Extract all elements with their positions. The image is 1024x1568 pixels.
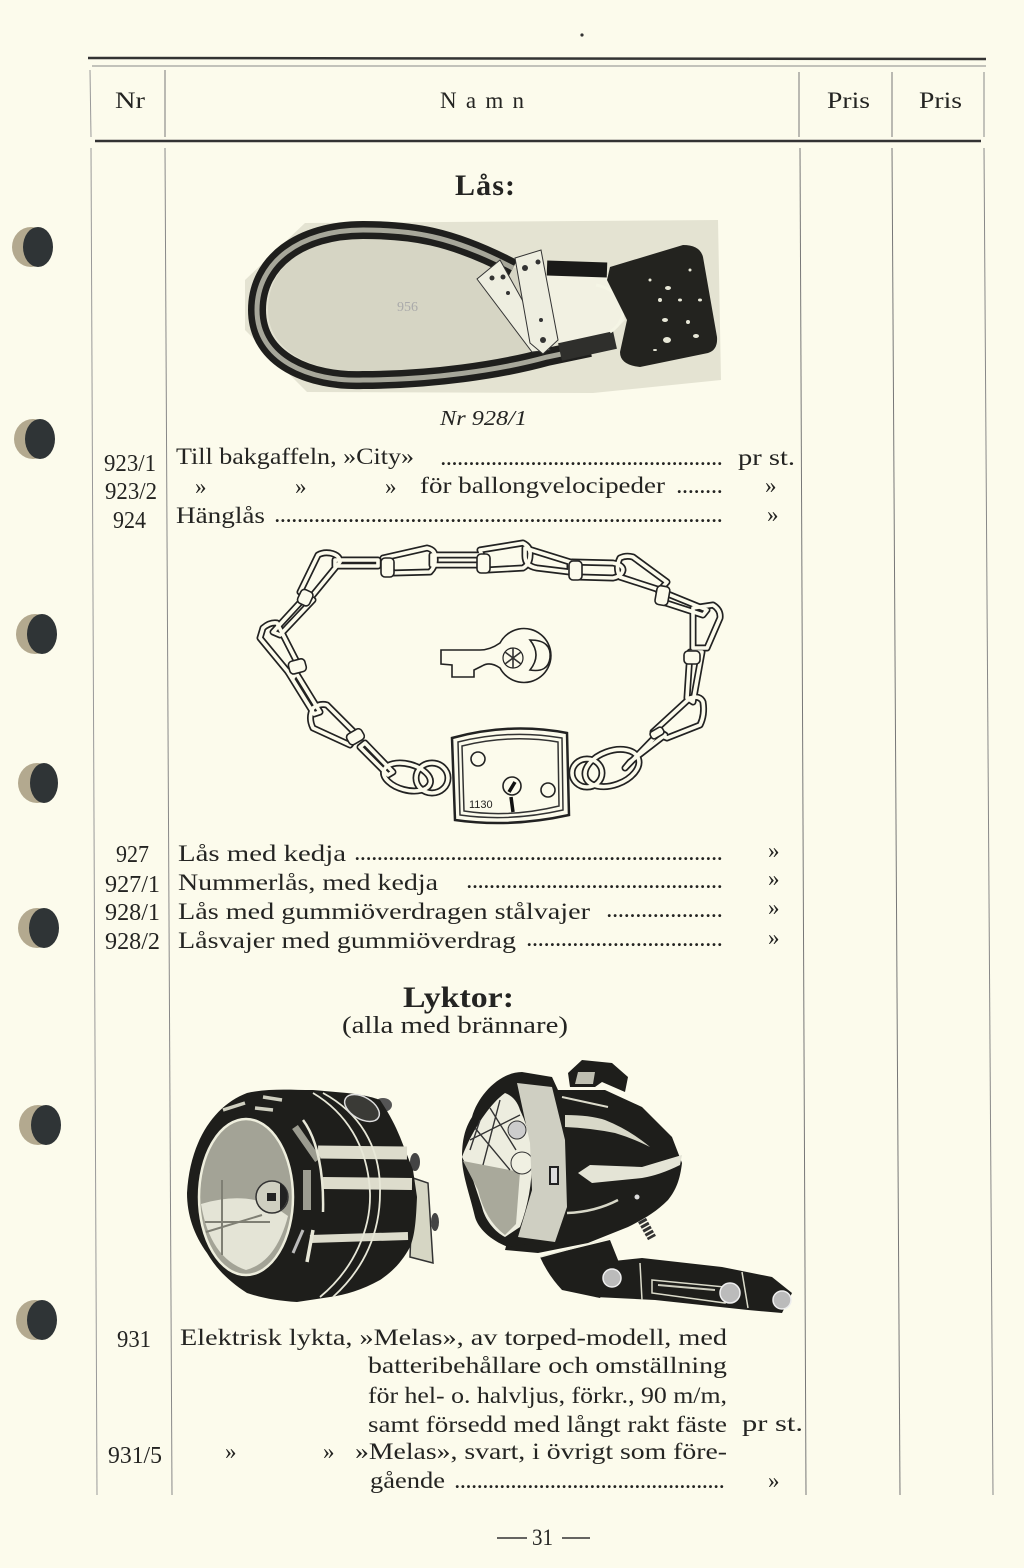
padlock	[452, 729, 569, 823]
price list rows: locks group 2: 927/1	[105, 872, 160, 898]
table header	[115, 88, 962, 113]
lens	[199, 1119, 293, 1275]
price list rows: locks group 2: »	[768, 925, 780, 950]
outer rim	[462, 1072, 555, 1247]
mounting bracket	[410, 1178, 433, 1263]
price list rows: locks group 1: 923/2	[105, 479, 157, 505]
price list rows: locks group 2: »	[768, 838, 780, 863]
price list rows: locks group 1: »	[295, 474, 306, 499]
price list rows: lamps: pr st.	[742, 1411, 803, 1436]
knob	[568, 1060, 628, 1092]
heading: Lyktor: Lyktor:	[403, 981, 514, 1014]
price list rows: locks group 1: »	[765, 473, 776, 498]
mounting arm	[595, 1258, 792, 1313]
badge	[340, 1089, 384, 1127]
price list rows: locks group 1: Hänglås	[176, 503, 265, 528]
price list rows: locks group 2: 927	[116, 842, 149, 868]
price list rows: lamps: samt försedd med långt rakt fäste	[368, 1412, 727, 1437]
table header: Pris	[919, 88, 962, 113]
price list rows: locks group 2: Lås med kedja	[178, 841, 346, 866]
price list rows: lamps: »	[768, 1468, 780, 1493]
price list rows: lamps: Elektrisk lykta, »Melas», av torped-modell, med	[180, 1325, 728, 1350]
price list rows: locks group 2: .............................................	[467, 872, 722, 892]
table header: N a m n	[440, 88, 524, 113]
price list rows: lamps: »Melas», svart, i övrigt som före-	[355, 1439, 727, 1464]
illustration: chain lock with key	[260, 543, 720, 823]
price list rows: locks group 1: ........	[677, 477, 722, 497]
price list rows: lamps: för hel- o. halvljus, förkr., 90 m/m,	[368, 1383, 727, 1408]
speck at top of page	[580, 33, 584, 37]
lock pad	[607, 245, 717, 367]
price list rows: locks group 2: »	[768, 866, 780, 891]
lens	[462, 1093, 532, 1237]
price list rows: locks group 2	[105, 838, 780, 955]
price list rows: lamps	[108, 1325, 803, 1493]
lamp underside	[540, 1240, 620, 1298]
price list rows: locks group 1: »	[767, 502, 778, 527]
heading: Lås: Lås:	[455, 169, 515, 202]
price list rows: locks group 1: ..................................................	[441, 449, 722, 469]
chain knots	[287, 554, 700, 746]
photo: cable lock: 956	[397, 300, 418, 315]
price list rows: locks group 1: pr st.	[738, 445, 795, 470]
price list rows: locks group 2: Lås med gummiöverdragen stålvajer	[178, 899, 590, 924]
price list rows: lamps: 931/5	[108, 1443, 162, 1469]
price list rows: locks group 2: 928/1	[105, 900, 160, 926]
price list rows: lamps: ................................................	[455, 1472, 724, 1492]
price list rows: lamps: gående	[370, 1468, 445, 1493]
price list rows: locks group 2: Låsvajer med gummiöverdrag	[178, 928, 517, 953]
price list rows: locks group 1: 923/1	[104, 451, 156, 477]
price list rows: lamps: »	[323, 1439, 334, 1464]
illustration: round lamp	[187, 1089, 439, 1302]
price list rows: locks group 1	[104, 444, 795, 534]
price list rows: locks group 1: 924	[113, 508, 146, 534]
lamp body	[187, 1090, 417, 1302]
price list rows: locks group 1: »	[195, 474, 206, 499]
price list rows: locks group 2: .................................................................	[355, 844, 722, 864]
price list rows: lamps: batteribehållare och omställning	[368, 1353, 728, 1378]
page number: 31	[532, 1525, 553, 1550]
price list rows: locks group 1: »	[385, 474, 396, 499]
price list rows: locks group 2: 928/2	[105, 929, 160, 955]
chrome rim band	[517, 1083, 567, 1242]
illustration: torpedo lamp	[462, 1060, 792, 1313]
photo: cable lock	[245, 220, 721, 393]
page number	[497, 1525, 590, 1550]
price list rows: locks group 1: Till bakgaffeln, »City»	[176, 444, 414, 469]
key	[441, 628, 551, 682]
key tags	[477, 250, 558, 354]
table header: Nr	[115, 88, 145, 113]
price list rows: lamps: 931	[117, 1327, 151, 1353]
price list rows: locks group 2: ..................................	[527, 930, 722, 950]
chrome stripes and rings	[223, 1093, 412, 1297]
shell	[505, 1077, 682, 1253]
price list rows: locks group 1: ...............................................................................	[275, 506, 722, 526]
price list rows: locks group 1: för ballongvelocipeder	[420, 473, 665, 498]
price list rows: locks group 2: ....................	[607, 901, 722, 921]
price list rows: lamps: »	[225, 1439, 236, 1464]
binder punch holes	[12, 227, 61, 1340]
padlock: 1130	[469, 799, 493, 811]
caption: Nr 928/1: Nr 928/1	[439, 406, 527, 430]
price list rows: locks group 2: Nummerlås, med kedja	[178, 870, 438, 895]
price list rows: locks group 2: »	[768, 895, 780, 920]
subheading: (alla med brännare)	[342, 1013, 568, 1039]
table header: Pris	[827, 88, 870, 113]
